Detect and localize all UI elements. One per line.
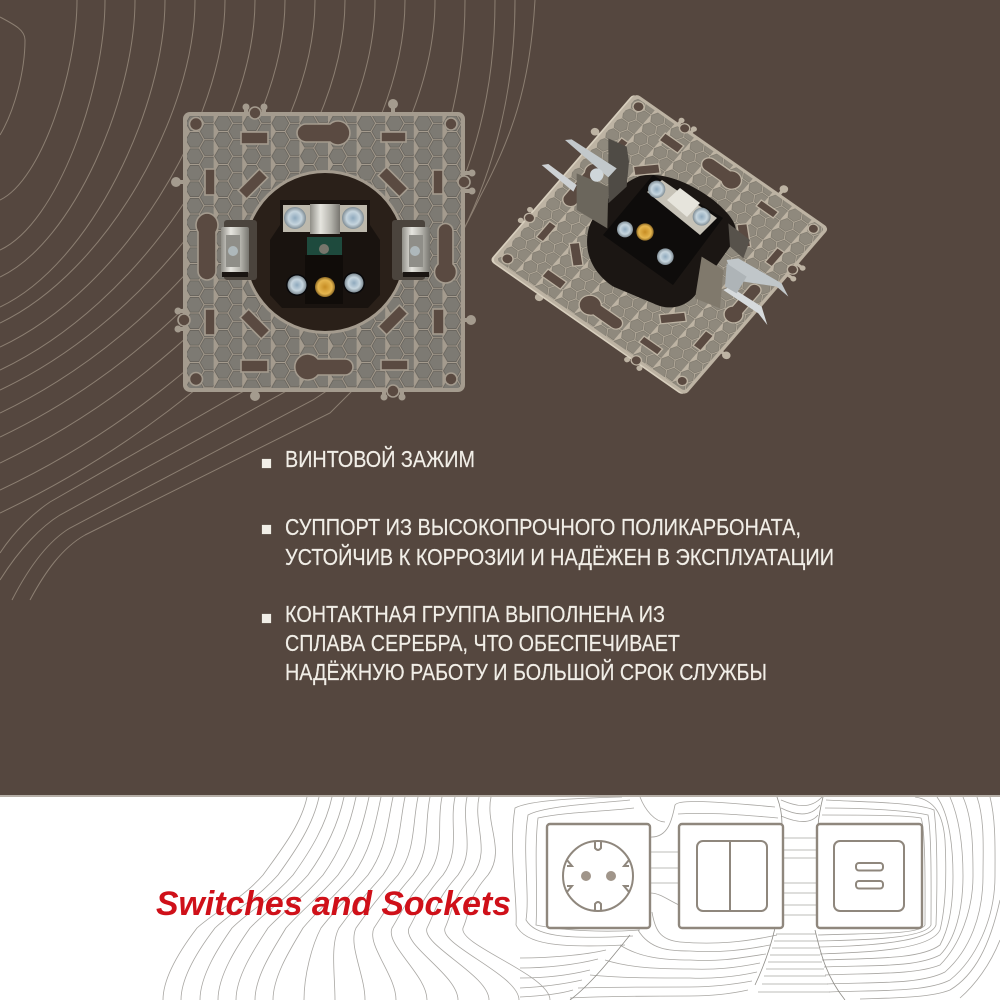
- brand name: Switches and Sockets: [156, 885, 511, 923]
- central body: [243, 170, 407, 334]
- left clamp with terminals: [542, 138, 629, 228]
- icon: USB charger frame: [817, 824, 922, 928]
- background contour lines: [0, 0, 535, 600]
- contact bridge: [283, 204, 367, 234]
- lower screws: [286, 255, 365, 304]
- feature list: [262, 445, 834, 685]
- green insert: [307, 237, 342, 256]
- central body: [587, 175, 736, 307]
- bottom white band: [0, 795, 1000, 1000]
- icon: socket frame: [547, 824, 650, 928]
- right side clamp: [392, 220, 430, 280]
- terminal block: [270, 200, 380, 308]
- item: silver alloy contacts: КОНТАКТНАЯ ГРУППА ВЫПОЛНЕНА ИЗ: [285, 601, 665, 627]
- lower screws: [617, 221, 674, 265]
- item: polycarbonate support: СУППОРТ ИЗ ВЫСОКОПРОЧНОГО ПОЛИКАРБОНАТА,: [285, 514, 801, 540]
- left side clamp: [221, 220, 257, 280]
- item: screw clamp: ВИНТОВОЙ ЗАЖИМ: [285, 445, 475, 472]
- item: polycarbonate support: [262, 514, 834, 570]
- right clamp with terminals: [695, 223, 788, 325]
- mounting plate, front view: [171, 99, 476, 401]
- item: polycarbonate support: УСТОЙЧИВ К КОРРОЗИИ И НАДЁЖЕН В ЭКСПЛУАТАЦИИ: [285, 543, 834, 570]
- item: silver alloy contacts: НАДЁЖНУЮ РАБОТУ И БОЛЬШОЙ СРОК СЛУЖБЫ: [285, 658, 767, 685]
- mounting plate, angled view: [479, 80, 843, 406]
- terminal block: [603, 175, 723, 285]
- band contour lines: [163, 797, 1000, 1000]
- item: silver alloy contacts: [262, 601, 767, 685]
- product photo: socket mechanism, angled view: [479, 80, 843, 406]
- item: silver alloy contacts: СПЛАВА СЕРЕБРА, ЧТО ОБЕСПЕЧИВАЕТ: [285, 630, 680, 656]
- contact bridge: [647, 180, 717, 235]
- icon: double switch frame: [679, 824, 783, 928]
- product photo: socket mechanism, front view: [171, 99, 476, 401]
